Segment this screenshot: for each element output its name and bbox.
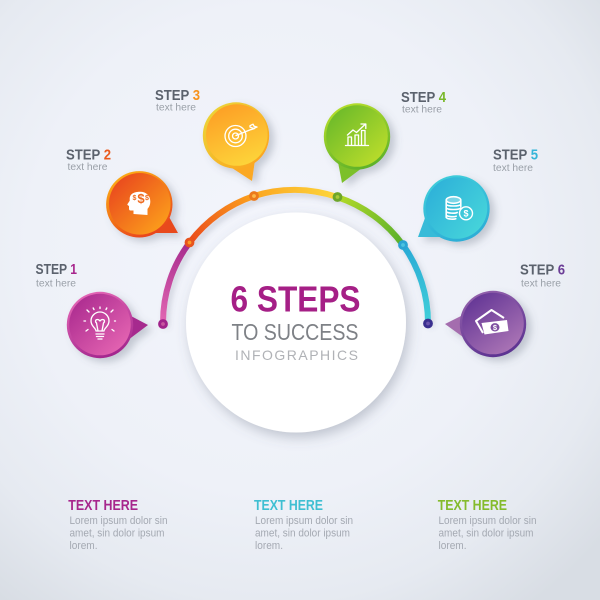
step 4 caption: text here bbox=[402, 104, 442, 116]
subtitle: to success: TO SUCCESS bbox=[232, 319, 358, 345]
step 2 caption: text here bbox=[68, 161, 108, 173]
step labels bbox=[36, 87, 565, 290]
arc segment 1 bbox=[163, 242, 190, 324]
face bbox=[426, 177, 487, 239]
central white circle bbox=[186, 212, 406, 432]
line 3: lorem. bbox=[255, 540, 283, 552]
step 6 caption: text here bbox=[521, 278, 561, 290]
step 1 label: STEP 1 bbox=[36, 261, 77, 278]
face bbox=[69, 294, 131, 355]
heading: TEXT HERE bbox=[438, 497, 507, 514]
small dollar coin bbox=[460, 207, 472, 220]
badge body bbox=[324, 103, 390, 183]
face bbox=[206, 104, 268, 166]
dollar mark: $ bbox=[463, 208, 469, 218]
face bbox=[326, 105, 388, 167]
text block left bbox=[68, 497, 168, 552]
line 2: amet, sin dolor ipsum bbox=[70, 528, 164, 540]
face bbox=[462, 293, 524, 354]
step 4 label: STEP 4 bbox=[401, 89, 447, 106]
arc segment 2 bbox=[190, 196, 254, 242]
subtitle: infographics: INFOGRAPHICS bbox=[235, 347, 358, 363]
line 3: lorem. bbox=[70, 540, 98, 552]
step 3 caption: text here bbox=[156, 102, 196, 114]
line 1: Lorem ipsum dolor sin bbox=[438, 515, 536, 527]
dot 2 bbox=[186, 239, 193, 246]
step 2 label: STEP 2 bbox=[66, 146, 111, 164]
badge body bbox=[445, 291, 526, 357]
title: 6 steps: 6 STEPS bbox=[230, 278, 360, 320]
line 2: amet, sin dolor ipsum bbox=[255, 528, 350, 540]
back note bbox=[476, 310, 504, 333]
small dollar right: $ bbox=[145, 195, 149, 202]
step 1 caption: text here bbox=[36, 278, 76, 290]
dot 3 bbox=[251, 193, 257, 199]
icon: head with dollars bbox=[127, 191, 150, 215]
timeline arc bbox=[163, 190, 428, 324]
step 5 caption: text here bbox=[493, 162, 533, 174]
arc node dots bbox=[160, 193, 431, 327]
title block bbox=[230, 278, 360, 363]
face bbox=[109, 173, 171, 235]
badge body bbox=[106, 171, 178, 238]
line 3: lorem. bbox=[438, 540, 466, 552]
icon: target bbox=[225, 124, 257, 146]
arc segment 5 bbox=[403, 245, 428, 323]
step 6 label: STEP 6 bbox=[520, 262, 565, 278]
small dollar left: $ bbox=[133, 195, 137, 202]
heading: TEXT HERE bbox=[254, 497, 323, 514]
arc segment 4 bbox=[337, 197, 403, 245]
step 6 badge bbox=[445, 291, 526, 357]
dollar mark: $ bbox=[493, 323, 498, 332]
arc segment 3 bbox=[254, 190, 337, 197]
front note bbox=[482, 320, 508, 334]
head silhouette bbox=[127, 192, 150, 215]
dot 5 bbox=[400, 242, 406, 248]
dot 6 bbox=[425, 320, 431, 327]
badge body bbox=[67, 292, 148, 358]
icon: light bulb bbox=[84, 307, 116, 339]
line 2: amet, sin dolor ipsum bbox=[438, 528, 534, 540]
step 3 label: STEP 3 bbox=[155, 87, 200, 104]
badge body bbox=[418, 175, 490, 242]
big dollar: $ bbox=[137, 191, 145, 206]
dot 4 bbox=[334, 194, 341, 200]
coin stack bbox=[446, 197, 461, 219]
icon: growth chart bbox=[346, 124, 368, 146]
dot 1 bbox=[160, 321, 166, 327]
badge body bbox=[203, 102, 269, 181]
step 4 badge bbox=[324, 103, 390, 183]
step 5 badge bbox=[418, 175, 490, 242]
step 3 badge bbox=[203, 102, 269, 181]
step 5 label: STEP 5 bbox=[493, 146, 538, 164]
bill centre bbox=[490, 323, 500, 331]
step 2 badge bbox=[106, 171, 178, 238]
line 1: Lorem ipsum dolor sin bbox=[70, 515, 168, 527]
heading: TEXT HERE bbox=[68, 497, 138, 514]
line 1: Lorem ipsum dolor sin bbox=[255, 515, 353, 527]
text block right bbox=[438, 497, 536, 552]
step 1 badge bbox=[67, 292, 148, 358]
text block middle bbox=[254, 497, 353, 552]
